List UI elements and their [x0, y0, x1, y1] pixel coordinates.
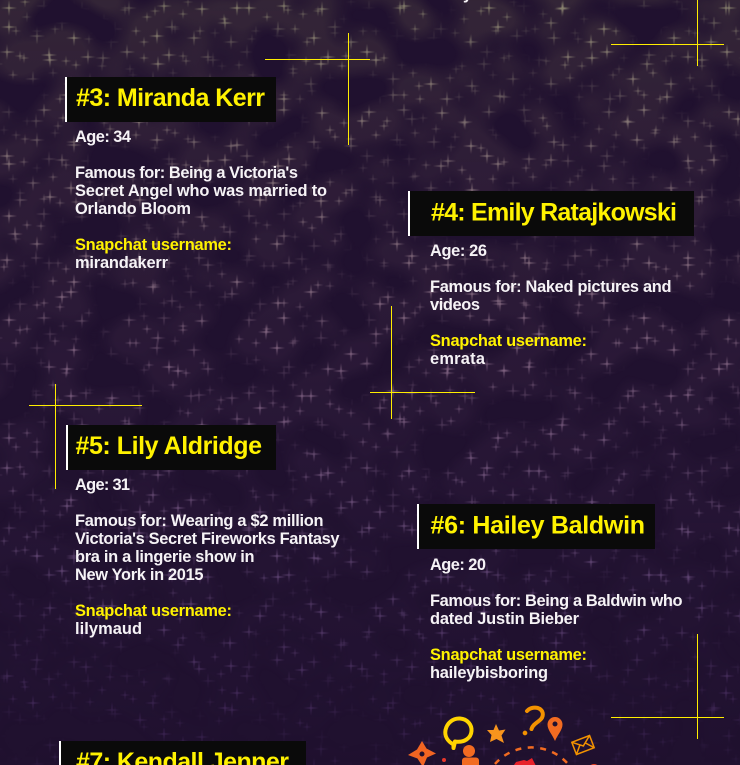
- snapchat username: Snapchat username:: [75, 236, 232, 254]
- panel: #6 Hailey Baldwin: [417, 504, 682, 682]
- panel: #7 Kendall Jenner heading: [59, 741, 306, 765]
- famous for: dated Justin Bieber: [430, 610, 580, 628]
- heading: #5: #5: Lily Aldridge: [76, 432, 262, 460]
- famous for: Famous for: Naked pictures and: [430, 278, 672, 296]
- snapchat username: [430, 646, 587, 682]
- age: Age: 26: [430, 242, 487, 260]
- famous for: Famous for: Being a Victoria's: [75, 164, 298, 182]
- social media icon cluster: [408, 708, 600, 765]
- snapchat username: haileybisboring: [430, 664, 548, 682]
- heading: #6: [417, 504, 655, 549]
- heading: #3: #3: Miranda Kerr: [76, 84, 265, 112]
- icon: red folder: [514, 758, 536, 765]
- crosshair: top left: [265, 33, 370, 145]
- famous for: [75, 164, 327, 218]
- snapchat username: [430, 332, 587, 368]
- icon: spiky compass star: [408, 741, 436, 765]
- snapchat username: mirandakerr: [75, 254, 169, 272]
- panel: #4 Emily Ratajkowski: [408, 191, 694, 368]
- famous for: Famous for: Being a Baldwin who: [430, 592, 682, 610]
- crosshair: middle left: [29, 384, 142, 489]
- famous for: [430, 592, 682, 628]
- dashed arc: [495, 747, 568, 764]
- heading: #5: [66, 425, 276, 470]
- famous for: [430, 278, 672, 314]
- icon: star: [487, 724, 506, 743]
- famous for: Orlando Bloom: [75, 200, 191, 218]
- heading: #4: [408, 191, 694, 236]
- icon: person: [462, 745, 479, 765]
- panel: #5 Lily Aldridge: [66, 425, 340, 638]
- snapchat username: Snapchat username:: [75, 602, 232, 620]
- crosshair: top right: [611, 0, 724, 66]
- heading: #6: #6: Hailey Baldwin: [430, 512, 645, 540]
- age: Age: 31: [75, 476, 130, 494]
- snapchat username: Snapchat username:: [430, 332, 587, 350]
- icon: question mark: [523, 708, 543, 735]
- famous for: bra in a lingerie show in: [75, 548, 254, 566]
- icon: red dot: [442, 758, 446, 762]
- famous for: Secret Angel who was married to: [75, 182, 327, 200]
- icon: red circle: [588, 764, 600, 765]
- panel: #3 Miranda Kerr: [65, 77, 327, 272]
- snapchat username: [75, 236, 232, 272]
- snapchat username: lilymaud: [75, 620, 142, 638]
- famous for: [75, 512, 340, 584]
- crosshair: bottom right: [611, 634, 724, 739]
- heading: #3: [65, 77, 276, 122]
- icon: envelope: [572, 736, 594, 754]
- icon: speech bubble: [445, 718, 472, 748]
- famous for: New York in 2015: [75, 566, 204, 584]
- heading: #4: #4: Emily Ratajkowski: [431, 198, 677, 226]
- snapchat username: emrata: [430, 350, 486, 368]
- snapchat username: Snapchat username:: [430, 646, 587, 664]
- age: Age: 20: [430, 556, 486, 574]
- famous for: Victoria's Secret Fireworks Fantasy: [75, 530, 340, 548]
- famous for: Famous for: Wearing a $2 million: [75, 512, 324, 530]
- famous for: videos: [430, 296, 480, 314]
- age: Age: 34: [75, 128, 132, 146]
- snapchat username: [75, 602, 232, 638]
- crosshair: middle centre: [370, 306, 475, 419]
- icon: location pin: [548, 717, 562, 741]
